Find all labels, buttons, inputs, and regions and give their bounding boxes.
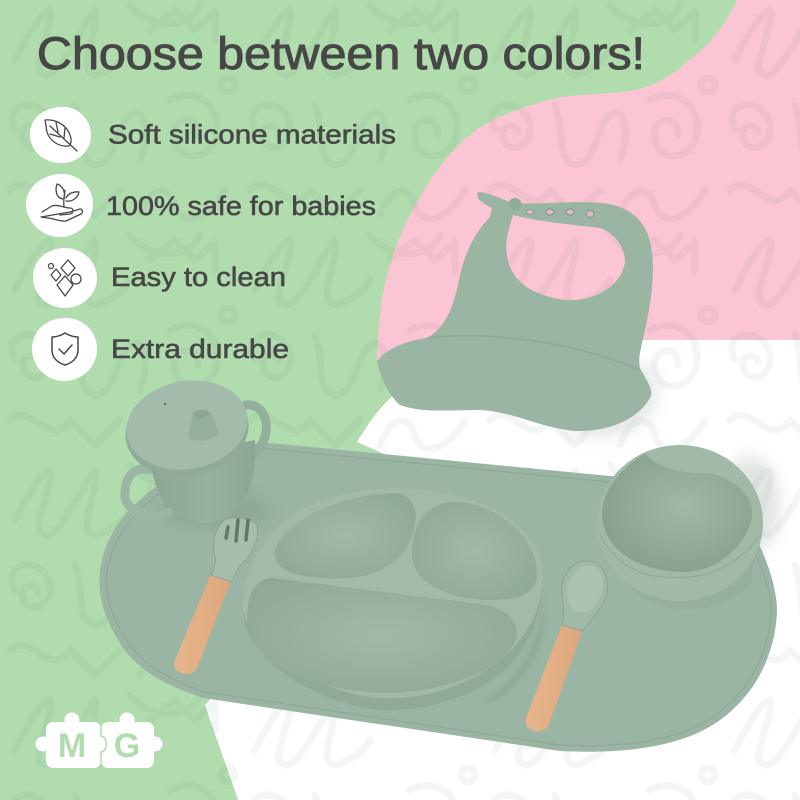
bib (377, 192, 658, 436)
fork: head (211, 518, 258, 582)
feature: extra durable (32, 318, 289, 381)
cup: left handle (125, 469, 170, 515)
icon: hand with plant (26, 174, 93, 237)
title: Choose between two colors! (37, 28, 645, 79)
cup: right handle (246, 405, 266, 456)
bowl: shadow (720, 455, 780, 555)
bib: body (377, 192, 653, 431)
logo: puzzle shape (36, 712, 162, 768)
cup: shadow (160, 494, 270, 526)
icon: leaf (30, 107, 91, 163)
logo: G: G (114, 727, 140, 765)
label: 100% safe for babies: 100% safe for babies (106, 191, 376, 221)
bowl: outer (597, 445, 763, 601)
feature: 100% safe for babies (26, 174, 376, 237)
spoon (526, 561, 609, 731)
plate: compartment left (275, 493, 416, 578)
divided plate (243, 488, 544, 710)
bowl: inner (602, 454, 752, 572)
placemat: inner rim (106, 449, 771, 746)
background: white blob (205, 340, 800, 800)
placemat: body (99, 443, 777, 752)
bowl: rim line (600, 535, 758, 578)
fork (174, 518, 258, 674)
feature: easy to clean (33, 248, 286, 308)
bib: shadow (560, 360, 658, 436)
icon: sparkles (33, 248, 97, 308)
bib: strap button (508, 198, 522, 210)
plate: base (243, 488, 543, 710)
fork: wooden handle (174, 574, 231, 674)
bowl (597, 445, 780, 609)
label: soft silicone materials: Soft silicone materials (108, 120, 396, 150)
label: easy to clean: Easy to clean (111, 262, 286, 292)
icon: shield with check (32, 318, 97, 381)
plate: shadow (480, 590, 544, 706)
placemat (99, 443, 777, 752)
cup: lid top (119, 371, 255, 479)
plate: compartment bottom (247, 578, 517, 693)
cup: body (150, 440, 255, 523)
cup: vent hole (164, 403, 166, 405)
spoon: wooden handle (526, 625, 582, 731)
spoon: head (562, 561, 607, 631)
plate: compartment right (412, 502, 537, 600)
cup (118, 371, 270, 526)
logo (36, 712, 162, 768)
spoon: bowl (561, 561, 609, 617)
label: extra durable: Extra durable (111, 334, 289, 364)
cup: spout tip (193, 410, 209, 418)
bib: strap holes (526, 209, 594, 218)
feature: soft silicone materials (30, 107, 396, 163)
plate: top face (243, 488, 543, 698)
fork: tines (226, 520, 248, 541)
cup: spout (188, 410, 219, 441)
feature list (26, 107, 396, 381)
background: pink blob (377, 0, 800, 360)
logo: M: M (58, 727, 86, 765)
bib: pocket fold (427, 336, 640, 370)
cup: lid side (118, 374, 256, 486)
bowl: suction base (620, 560, 755, 609)
